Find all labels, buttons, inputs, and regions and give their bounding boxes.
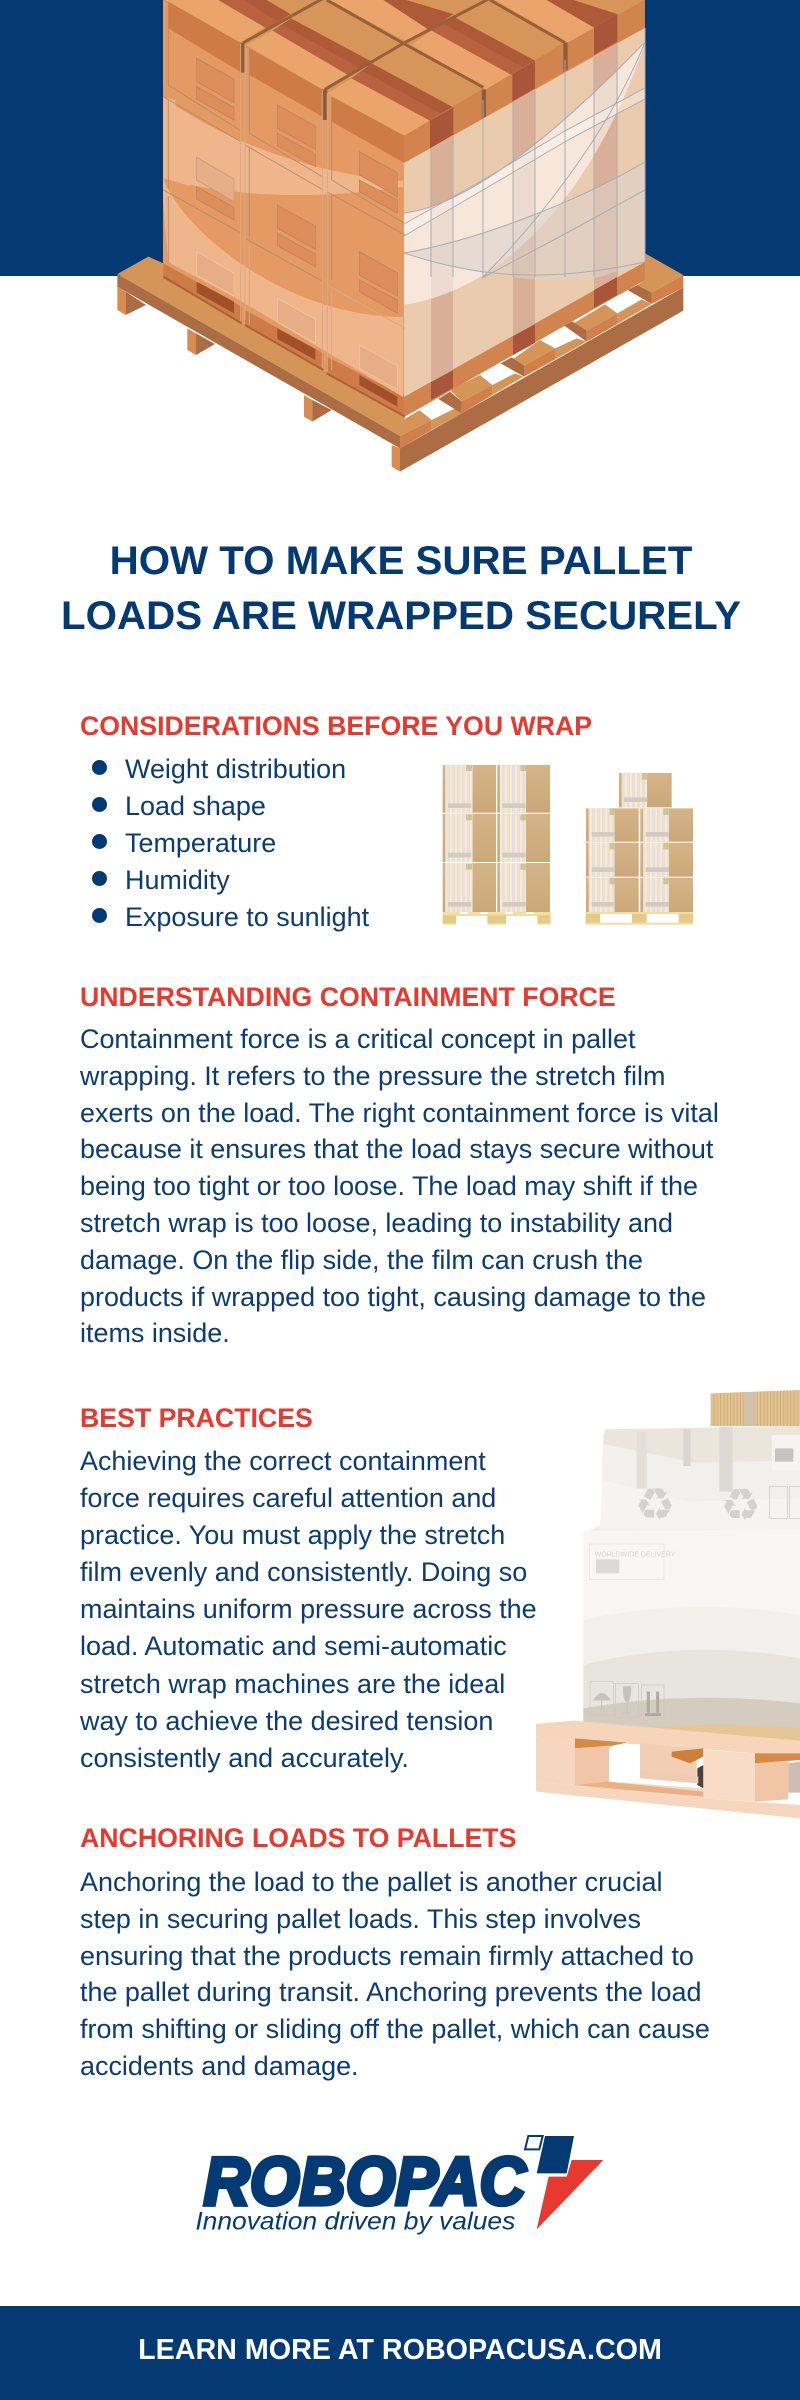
text: containment force: wrapping. It refers to the pressure the stretch film — [80, 1061, 665, 1091]
text: containment force: exerts on the load. The right containment force is vital — [80, 1098, 719, 1128]
blue header band — [0, 0, 800, 276]
text: containment force: items inside. — [80, 1318, 230, 1348]
text: anchoring loads: Anchoring the load to the pallet is another crucial — [80, 1867, 663, 1897]
right side faces — [404, 0, 645, 163]
text: containment force: damage. On the flip side, the film can crush the — [80, 1245, 643, 1275]
top faces — [165, 0, 645, 136]
text: containment force: stretch wrap is too loose, leading to instability and — [80, 1208, 673, 1238]
bullet list: considerations: Exposure to sunlight — [125, 902, 369, 932]
text: containment force: because it ensures that the load stays secure without — [80, 1134, 713, 1164]
heading: best practices: BEST PRACTICES — [80, 1403, 313, 1433]
text: containment force — [80, 1024, 719, 1348]
pallet — [117, 253, 683, 472]
stacked boxes — [163, 0, 645, 417]
heading: anchoring loads: ANCHORING LOADS TO PALLETS — [80, 1823, 516, 1853]
footer bar: LEARN MORE AT ROBOPACUSA.COM — [138, 2334, 662, 2366]
wrapped load — [583, 1426, 800, 1742]
logo: Robopac — [195, 2135, 604, 2235]
wrapped load: ♻ — [720, 1479, 761, 1532]
title: LOADS ARE WRAPPED SECURELY — [61, 593, 741, 638]
bullet list: considerations — [92, 754, 369, 932]
box outlines and labels — [163, 3, 405, 417]
text: anchoring loads: accidents and damage. — [80, 2051, 359, 2081]
text: containment force: products if wrapped too tight, causing damage to the — [80, 1282, 706, 1312]
heading: understanding containment force: UNDERSTANDING CONTAINMENT FORCE — [80, 982, 616, 1012]
text: anchoring loads: the pallet during transit. Anchoring prevents the load — [80, 1977, 701, 2007]
logo mark — [525, 2136, 603, 2229]
footer bar — [0, 2306, 800, 2400]
text: best practices: force requires careful attention and — [80, 1483, 496, 1513]
text: best practices: practice. You must apply the stretch — [80, 1520, 505, 1550]
text: best practices: Achieving the correct containment — [80, 1446, 486, 1476]
tagline: Innovation driven by values — [195, 2207, 515, 2235]
bullet list: considerations: Weight distribution — [125, 754, 346, 784]
illustration: wrapped pallet load — [117, 0, 684, 472]
text: best practices: consistently and accurately. — [80, 1743, 409, 1773]
wooden pallet — [536, 1721, 800, 1818]
text: best practices: maintains uniform pressure across the — [80, 1594, 537, 1624]
text: anchoring loads — [80, 1867, 710, 2081]
top carton — [711, 1390, 800, 1426]
text: best practices: load. Automatic and semi-automatic — [80, 1631, 507, 1661]
text: best practices: film evenly and consistently. Doing so — [80, 1557, 527, 1587]
left side faces — [163, 2, 405, 417]
side film — [404, 28, 645, 417]
bullet list: considerations: Load shape — [125, 791, 266, 821]
text: containment force: Containment force is a critical concept in pallet — [80, 1024, 635, 1054]
wordmark: ROBOPAC — [204, 2144, 526, 2220]
illustration: two stacked pallets of boxes — [442, 765, 694, 925]
text: anchoring loads: step in securing pallet loads. This step involves — [80, 1904, 641, 1934]
stretch film overlay — [163, 3, 645, 417]
photo: wrapped load on wooden pallet — [536, 1390, 800, 1818]
heading: considerations: CONSIDERATIONS BEFORE YOU WRAP — [80, 711, 592, 741]
text: best practices: stretch wrap machines are the ideal — [80, 1669, 505, 1699]
title: HOW TO MAKE SURE PALLET — [110, 538, 692, 583]
text: best practices: way to achieve the desired tension — [80, 1706, 493, 1736]
text: anchoring loads: from shifting or sliding off the pallet, which can cause — [80, 2014, 710, 2044]
bullet list: considerations: Humidity — [125, 865, 230, 895]
wrapped load: WORLDWIDE DELIVERY — [595, 1552, 676, 1559]
title — [61, 538, 741, 638]
text: anchoring loads: ensuring that the products remain firmly attached to — [80, 1941, 694, 1971]
wrapped load: ♻ — [635, 1478, 675, 1531]
bullet list: considerations: Temperature — [125, 828, 276, 858]
text: best practices — [80, 1446, 537, 1773]
text: containment force: being too tight or too loose. The load may shift if the — [80, 1171, 698, 1201]
